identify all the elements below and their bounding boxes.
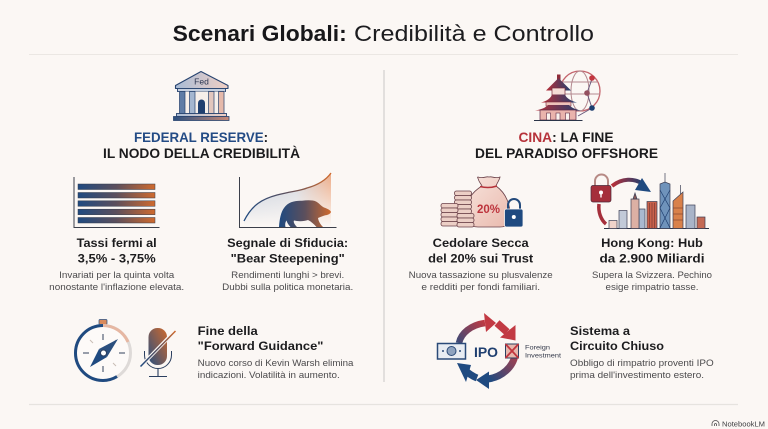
title: Scenari Globali:	[173, 21, 347, 46]
heading: Cina: CINA: LA FINE	[518, 129, 614, 145]
icon: closed circuit IPO loop: Foreign	[525, 344, 551, 352]
text: Hong Kong: Hong Kong: Hub	[601, 236, 703, 250]
heading: Cina: DEL PARADISO OFFSHORE	[475, 145, 658, 161]
text: sistema a circuito chiuso: Sistema a	[570, 324, 630, 338]
text: forward guidance	[198, 324, 354, 380]
text: cedolare secca: e redditi per fondi familiari.	[421, 281, 540, 292]
text: sistema a circuito chiuso: Circuito Chiuso	[570, 339, 664, 353]
text: forward guidance: Nuovo corso di Kevin Warsh elimina	[198, 357, 354, 368]
text: Hong Kong	[592, 236, 712, 292]
text: forward guidance: "Forward Guidance"	[198, 339, 324, 353]
panel: Federal Reserve	[49, 72, 354, 380]
text: cedolare secca: Nuova tassazione su plusvalenze	[409, 269, 553, 280]
panel: Cina	[409, 71, 714, 389]
text: rates: Invariati per la quinta volta	[59, 269, 175, 280]
text: sistema a circuito chiuso: prima dell'investimento estero.	[570, 369, 704, 380]
chart: flat rate bars	[74, 177, 160, 228]
icon: closed circuit IPO loop: Investment	[525, 352, 561, 360]
icon: closed circuit IPO loop	[438, 313, 561, 389]
title: Credibilità e Controllo	[354, 21, 594, 46]
title	[173, 21, 594, 46]
text: bear steepening: "Bear Steepening"	[231, 252, 345, 266]
icon: lock, arrow and Hong Kong skyline	[591, 173, 709, 228]
icon: pagoda	[534, 74, 582, 120]
text: forward guidance: indicazioni. Volatilità in aumento.	[198, 369, 340, 380]
text: sistema a circuito chiuso: Obbligo di rimpatrio proventi IPO	[570, 357, 714, 368]
text: rates	[49, 236, 184, 292]
chart: bear steepening curve	[240, 173, 336, 228]
icon: compass stopwatch	[75, 320, 130, 380]
text: bear steepening: Segnale di Sfiducia:	[227, 236, 348, 250]
text: rates: nonostante l'inflazione elevata.	[49, 281, 184, 292]
text: Hong Kong: Supera la Svizzera. Pechino	[592, 269, 712, 280]
text: bear steepening	[222, 236, 353, 292]
text: cedolare secca: del 20% sui Trust	[428, 252, 533, 266]
text: rates: Tassi fermi al	[77, 236, 157, 250]
heading: Federal Reserve: FEDERAL RESERVE:	[134, 129, 268, 145]
icon: closed circuit IPO loop: IPO	[474, 345, 498, 360]
icon: Fed building	[174, 72, 229, 120]
icon: money bag with coins and lock: 20%	[477, 204, 500, 216]
text: forward guidance: Fine della	[198, 324, 258, 338]
text: bear steepening: Dubbi sulla politica monetaria.	[222, 281, 353, 292]
text: Hong Kong: da 2.900 Miliardi	[600, 252, 704, 266]
heading: Federal Reserve: IL NODO DELLA CREDIBILITÀ	[103, 145, 300, 161]
text: Hong Kong: esige rimpatrio tasse.	[606, 281, 698, 292]
text: bear steepening: Rendimenti lunghi > brevi.	[231, 269, 344, 280]
icon: bear	[279, 200, 331, 227]
text: cedolare secca	[409, 236, 553, 292]
text: rates: 3,5% - 3,75%	[78, 252, 156, 266]
heading: Cina	[475, 129, 658, 161]
heading: Federal Reserve	[103, 129, 300, 161]
text: cedolare secca: Cedolare Secca	[433, 236, 529, 250]
icon: globe network	[560, 71, 600, 116]
watermark: NotebookLM: NotebookLM	[722, 420, 765, 428]
icon: Fed building: Fed	[194, 76, 209, 86]
icon: muted microphone	[140, 328, 176, 376]
icon: money bag with coins and lock	[441, 177, 523, 227]
text: sistema a circuito chiuso	[570, 324, 714, 380]
